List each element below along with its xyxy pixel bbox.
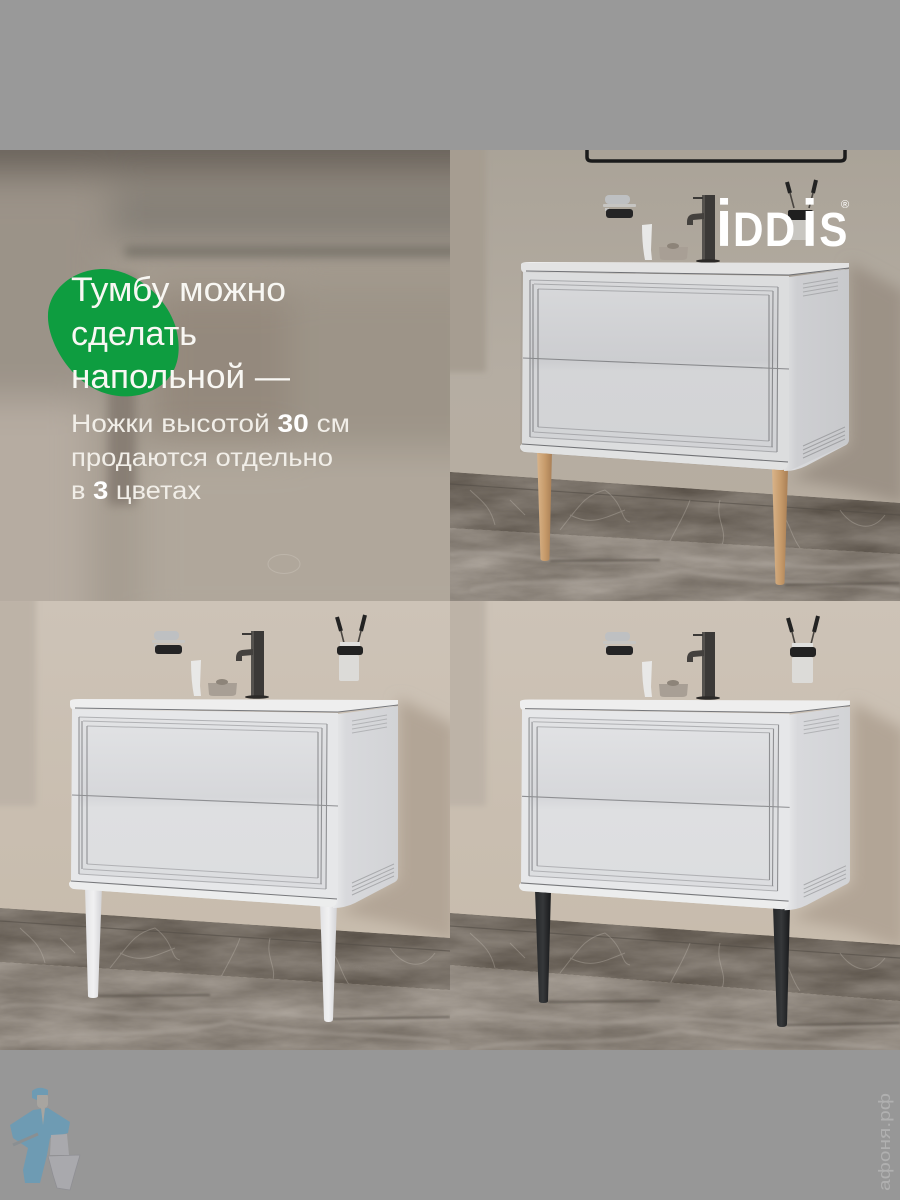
- top grey band: [0, 0, 900, 150]
- accessories: [152, 631, 269, 699]
- floor: [450, 965, 900, 1050]
- skirting: [0, 908, 450, 990]
- cabinet: [519, 700, 850, 910]
- subtitle: в 3 цветах: [71, 477, 202, 505]
- skirting: [450, 913, 900, 1001]
- floor: [450, 528, 900, 601]
- black legs: [535, 890, 790, 1027]
- logo: i: [716, 188, 732, 261]
- toothbrush cup: [337, 615, 365, 681]
- green blob: [48, 269, 179, 396]
- mirror: [587, 150, 845, 161]
- wooden legs: [537, 450, 788, 585]
- accessories: [603, 632, 720, 700]
- faint oval reflection: [268, 554, 300, 574]
- cabinet: [69, 699, 398, 908]
- wall: [450, 150, 900, 554]
- bottom grey band: [0, 1050, 900, 1200]
- heading: [71, 271, 290, 396]
- panel: vanity with wooden legs: [440, 140, 900, 601]
- white legs: [85, 886, 337, 1022]
- logo: D: [733, 202, 764, 257]
- subtitle: Ножки высотой 30 см: [71, 410, 350, 438]
- panel: vanity with white legs: [0, 595, 455, 1050]
- panel: vanity with black legs: [440, 595, 900, 1050]
- panel: text on blurred wall: [0, 150, 450, 601]
- heading: сделать: [71, 315, 197, 353]
- subtitle: [71, 410, 350, 505]
- icon: plumber watermark: [10, 1088, 80, 1190]
- accessories: [603, 195, 720, 263]
- heading: Тумбу можно: [71, 271, 286, 309]
- floor: [0, 962, 450, 1050]
- logo: [720, 198, 849, 246]
- toothbrush cup: [787, 180, 816, 240]
- heading: напольной —: [71, 358, 290, 396]
- logo: S: [819, 202, 847, 257]
- watermark text: афоня.рф: [875, 1093, 894, 1191]
- skirting: [450, 472, 900, 554]
- wall: [450, 601, 900, 1001]
- soft shadow edges: [108, 247, 465, 505]
- logo: D: [765, 202, 795, 257]
- subtitle: продаются отдельно: [71, 444, 333, 472]
- wall: [0, 601, 450, 990]
- logo: i: [802, 188, 818, 261]
- toothbrush cup: [788, 616, 818, 683]
- cabinet: [520, 262, 849, 471]
- logo: ®: [841, 199, 849, 211]
